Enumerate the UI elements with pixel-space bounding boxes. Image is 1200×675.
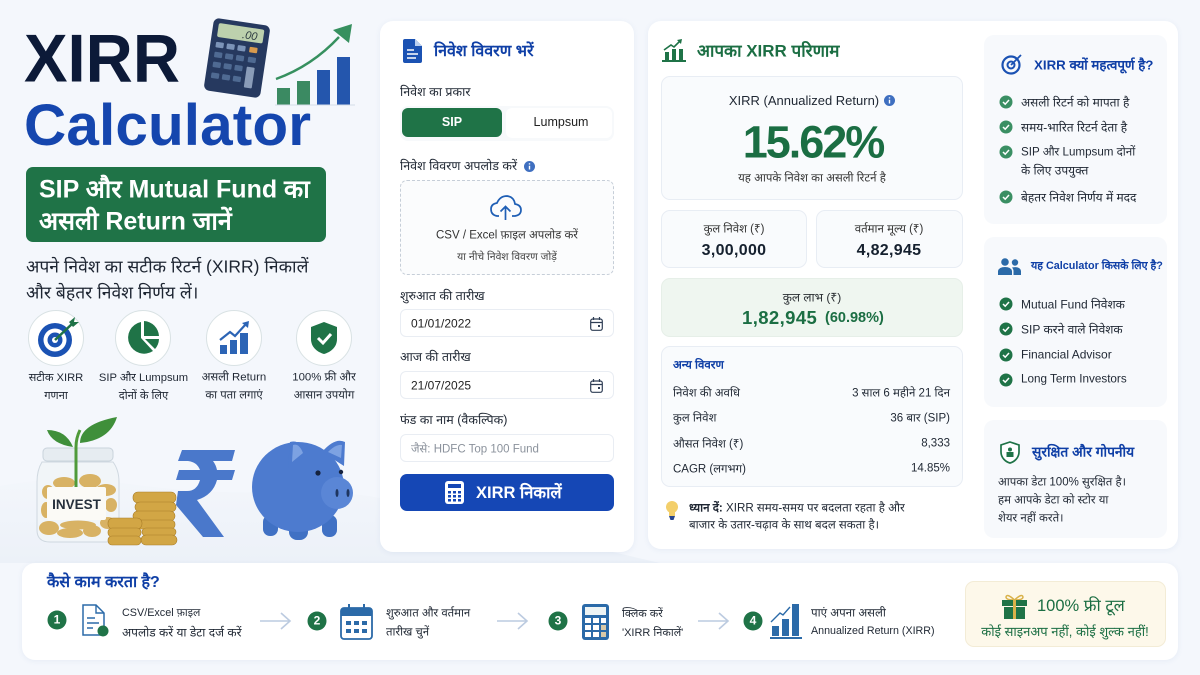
button: calculate XIRR: XIRR निकालें bbox=[476, 484, 562, 502]
input: fund name: जैसे: HDFC Top 100 Fund bbox=[411, 444, 539, 456]
step number: 3 bbox=[555, 614, 561, 628]
step 3: क्लिक करें bbox=[622, 608, 663, 620]
icon: rising bar chart with arrow bbox=[275, 24, 355, 106]
big number: 15.62% bbox=[743, 116, 883, 167]
callout: free tool: 100% फ्री टूल bbox=[1037, 597, 1125, 615]
toggle option: Lumpsum bbox=[506, 108, 612, 138]
step 2: तारीख चुनें bbox=[386, 627, 429, 639]
arrow bbox=[497, 612, 529, 630]
illustration: rupee symbol bbox=[176, 450, 235, 537]
arrow bbox=[698, 612, 730, 630]
panel: why XIRR matters bbox=[984, 35, 1167, 224]
card: XIRR value bbox=[661, 76, 963, 200]
icon: calendar bbox=[340, 604, 373, 640]
feature: SIP and Lumpsum bbox=[99, 310, 188, 402]
ground backdrop bbox=[0, 0, 660, 563]
arrow bbox=[260, 612, 292, 630]
feature: real return: का पता लगाएं bbox=[205, 390, 263, 402]
panel: who it is for bbox=[984, 237, 1167, 407]
input: current date: 21/07/2025 bbox=[411, 378, 471, 392]
panel: why XIRR matters: XIRR क्यों महत्वपूर्ण है? bbox=[1034, 58, 1153, 73]
row: CAGR: CAGR (लगभग) bbox=[673, 464, 746, 476]
intro text bbox=[26, 256, 309, 302]
card: total invested bbox=[661, 210, 807, 268]
card: other details: अन्य विवरण bbox=[673, 360, 724, 372]
toggle option: SIP bbox=[402, 108, 502, 137]
step 2: शुरुआत और वर्तमान bbox=[386, 608, 470, 620]
panel: how it works bbox=[22, 563, 1178, 660]
list item: बेहतर निवेश निर्णय में मदद bbox=[1021, 190, 1136, 204]
card: total gain: 1,82,945 bbox=[742, 307, 817, 328]
step 4 bbox=[743, 603, 943, 641]
row: count: कुल निवेश bbox=[673, 413, 716, 425]
icon: pie chart bbox=[115, 310, 171, 366]
card: total gain: कुल लाभ (₹) bbox=[783, 290, 841, 304]
icon: file upload bbox=[81, 604, 109, 640]
feature: SIP and Lumpsum: SIP और Lumpsum bbox=[99, 372, 188, 384]
intro text: अपने निवेश का सटीक रिटर्न (XIRR) निकालें bbox=[26, 256, 308, 276]
icon: light bulb bbox=[666, 501, 678, 520]
row: count: 36 बार (SIP) bbox=[890, 413, 950, 425]
icon: shield check bbox=[296, 310, 352, 366]
list item: SIP करने वाले निवेशक bbox=[1021, 322, 1123, 336]
step 4: Annualized Return (XIRR) bbox=[811, 625, 935, 637]
illustration: invest jar with sprout bbox=[36, 417, 120, 542]
row: duration: 3 साल 6 महीने 21 दिन bbox=[852, 388, 950, 400]
step 1: CSV/Excel फ़ाइल bbox=[122, 607, 200, 619]
panel: safe and private: आपका डेटा 100% सुरक्षित है। bbox=[998, 477, 1126, 489]
icon: shield bbox=[1000, 441, 1020, 464]
headline banner bbox=[26, 167, 326, 242]
panel: safe and private: हम आपके डेटा को स्टोर या bbox=[998, 495, 1108, 507]
callout: free tool: कोई साइनअप नहीं, कोई शुल्क नहीं! bbox=[981, 624, 1149, 639]
step number bbox=[48, 610, 66, 630]
feature: real return: असली Return bbox=[202, 372, 266, 384]
title bbox=[24, 20, 311, 158]
step 2 bbox=[307, 603, 487, 641]
card: current value: 4,82,945 bbox=[857, 242, 921, 259]
row: average: औसत निवेश (₹) bbox=[673, 439, 743, 451]
list item: Financial Advisor bbox=[1021, 347, 1112, 361]
step 3: 'XIRR निकालें' bbox=[622, 627, 683, 639]
list item bbox=[999, 373, 1149, 387]
note bbox=[689, 500, 905, 532]
card: total invested: कुल निवेश (₹) bbox=[704, 224, 764, 236]
list item: असली रिटर्न को मापता है bbox=[1021, 95, 1129, 109]
toggle: SIP or Lumpsum: Lumpsum bbox=[534, 115, 588, 129]
panel: safe and private: सुरक्षित और गोपनीय bbox=[1032, 444, 1134, 459]
feature: free and easy: 100% फ्री और bbox=[292, 372, 356, 384]
icon: growth chart bbox=[770, 603, 802, 639]
feature: accurate XIRR: गणना bbox=[44, 390, 68, 402]
icon: target bbox=[1001, 54, 1022, 75]
input: current date bbox=[400, 371, 614, 399]
row: average: 8,333 bbox=[921, 438, 950, 450]
panel: results bbox=[648, 21, 1178, 549]
input: start date bbox=[400, 309, 614, 337]
step number: 1 bbox=[54, 612, 60, 626]
icon: gift bbox=[1002, 594, 1027, 619]
card: XIRR value: XIRR (Annualized Return) bbox=[729, 93, 879, 108]
row: duration bbox=[673, 386, 950, 400]
card: total gain bbox=[661, 278, 963, 337]
step number: 4 bbox=[750, 614, 756, 628]
panel: who it is for: यह Calculator किसके लिए है? bbox=[1031, 260, 1163, 272]
icon: info bbox=[884, 95, 895, 106]
label: fund name: फंड का नाम (वैकल्पिक) bbox=[400, 413, 507, 427]
row: count bbox=[673, 411, 950, 425]
upload dropzone: CSV / Excel फ़ाइल अपलोड करें bbox=[436, 230, 578, 242]
icon: calculator illustration: .00 bbox=[241, 29, 259, 43]
panel: safe and private: शेयर नहीं करते। bbox=[998, 513, 1064, 525]
upload dropzone: या नीचे निवेश विवरण जोड़ें bbox=[457, 251, 557, 263]
input: fund name bbox=[400, 434, 614, 462]
panel: safe and private bbox=[984, 420, 1167, 538]
how it works heading: कैसे काम करता है? bbox=[47, 574, 160, 591]
list item: SIP और Lumpsum दोनों bbox=[1021, 146, 1135, 159]
list item: Long Term Investors bbox=[1021, 373, 1127, 386]
illustration: invest jar with sprout: INVEST bbox=[52, 497, 102, 512]
step number bbox=[548, 612, 568, 630]
icon: people bbox=[998, 258, 1021, 275]
button: calculate XIRR bbox=[400, 474, 614, 511]
icon: growth chart bbox=[206, 310, 262, 366]
card: total gain: (60.98%) bbox=[825, 310, 884, 326]
note: बाजार के उतार-चढ़ाव के साथ बदल सकता है। bbox=[689, 519, 879, 532]
illustration: gold coin stacks bbox=[108, 492, 178, 546]
feature: accurate XIRR bbox=[28, 310, 84, 402]
form heading: निवेश विवरण भरें bbox=[434, 43, 534, 60]
toggle: SIP or Lumpsum: SIP bbox=[442, 115, 462, 129]
toggle: SIP or Lumpsum bbox=[400, 106, 614, 141]
icon: info bbox=[524, 161, 535, 172]
row: average bbox=[673, 437, 950, 451]
icon: target bbox=[28, 310, 84, 366]
step 1 bbox=[47, 603, 252, 641]
banner line 2: असली Return जानें bbox=[39, 207, 232, 235]
panel: investment form bbox=[380, 21, 634, 552]
upload dropzone bbox=[400, 180, 614, 275]
card: current value bbox=[816, 210, 963, 268]
label: investment type: निवेश का प्रकार bbox=[400, 85, 470, 99]
card: total invested: 3,00,000 bbox=[702, 242, 766, 259]
banner line 1: SIP और Mutual Fund का bbox=[39, 175, 310, 203]
icon: results chart bbox=[662, 39, 686, 62]
callout: free tool bbox=[965, 581, 1166, 647]
label: upload: निवेश विवरण अपलोड करें bbox=[400, 159, 517, 173]
title line: XIRR: XIRR bbox=[24, 20, 180, 96]
title line: Calculator: Calculator bbox=[24, 93, 311, 158]
step 3 bbox=[548, 603, 688, 641]
card: current value: वर्तमान मूल्य (₹) bbox=[855, 224, 923, 236]
step 4: पाएं अपना असली bbox=[811, 607, 886, 620]
card: other details bbox=[661, 346, 963, 487]
list item: समय-भारित रिटर्न देता है bbox=[1021, 120, 1127, 134]
results heading: आपका XIRR परिणाम bbox=[697, 42, 839, 61]
icon: calculator bbox=[582, 604, 609, 640]
step number: 2 bbox=[314, 614, 320, 628]
feature: SIP and Lumpsum: दोनों के लिए bbox=[119, 390, 168, 402]
feature: free and easy bbox=[292, 310, 356, 402]
feature: real return bbox=[202, 310, 266, 402]
icon: calculator illustration bbox=[204, 18, 270, 98]
label: current date: आज की तारीख bbox=[400, 350, 471, 364]
icon: calculator bbox=[445, 481, 464, 504]
step number bbox=[744, 612, 762, 630]
row: CAGR bbox=[673, 463, 950, 476]
card: XIRR value: यह आपके निवेश का असली रिटर्न है bbox=[738, 173, 886, 185]
icon: calendar bbox=[590, 379, 603, 393]
icon: document bbox=[403, 39, 422, 63]
note: ध्यान दें: XIRR समय-समय पर बदलता रहता है और bbox=[689, 502, 905, 515]
feature: accurate XIRR: सटीक XIRR bbox=[29, 372, 83, 384]
row: duration: निवेश की अवधि bbox=[673, 388, 740, 400]
step number bbox=[308, 612, 326, 630]
label: start date: शुरुआत की तारीख bbox=[400, 289, 485, 303]
list item: के लिए उपयुक्त bbox=[1021, 163, 1088, 177]
row: CAGR: 14.85% bbox=[911, 463, 950, 475]
icon: cloud upload bbox=[490, 195, 522, 220]
input: start date: 01/01/2022 bbox=[411, 316, 471, 330]
illustration: blue piggy bank bbox=[252, 440, 353, 540]
feature: free and easy: आसान उपयोग bbox=[294, 390, 354, 402]
list item: Mutual Fund निवेशक bbox=[1021, 297, 1125, 311]
icon: calendar bbox=[590, 317, 603, 331]
list item bbox=[1000, 145, 1136, 178]
step 1: अपलोड करें या डेटा दर्ज करें bbox=[122, 625, 242, 639]
intro text: और बेहतर निवेश निर्णय लें। bbox=[26, 282, 198, 302]
